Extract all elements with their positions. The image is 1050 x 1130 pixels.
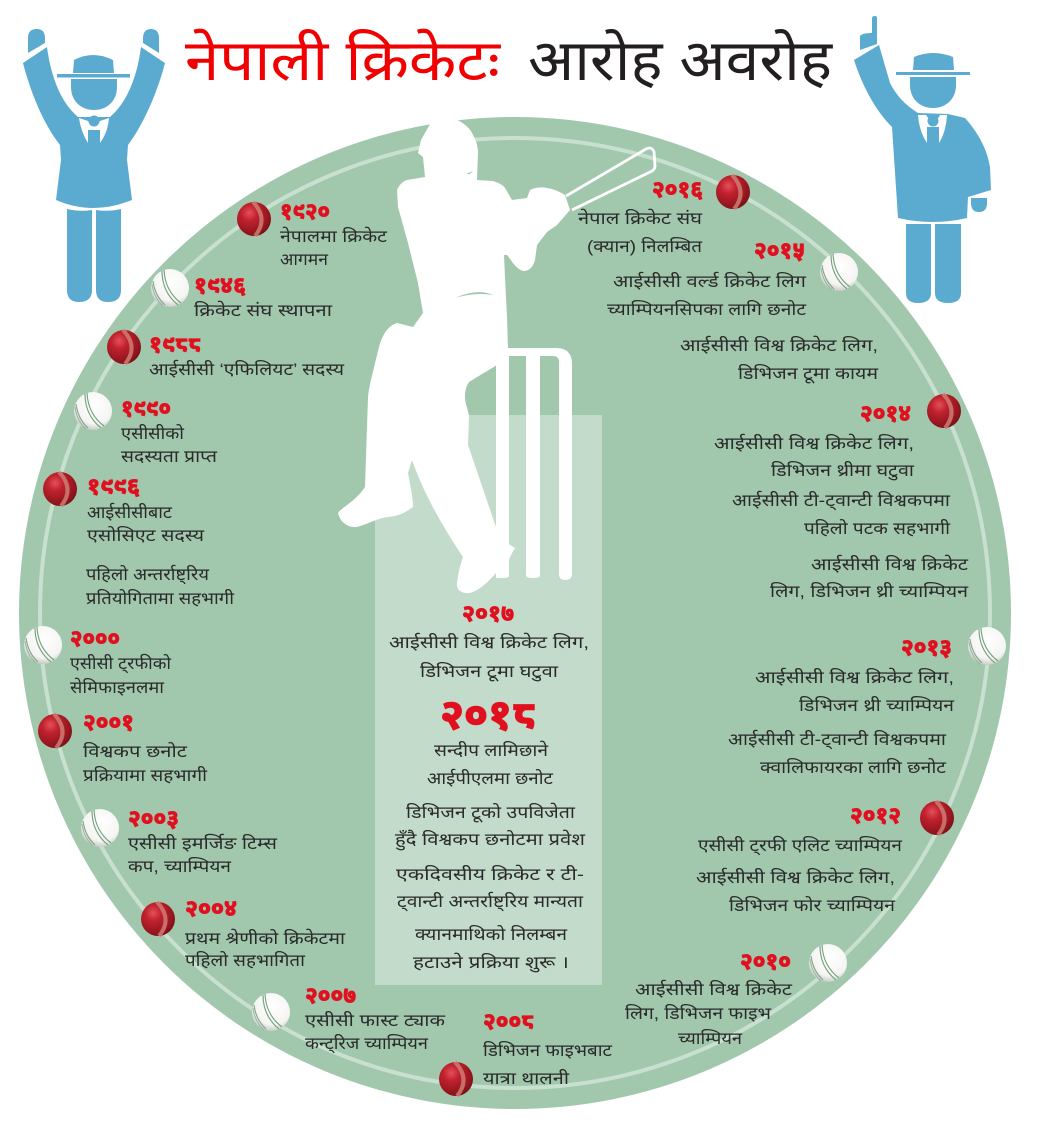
timeline 1996: एसोसिएट सदस्य (87, 525, 205, 545)
timeline 2000: सेमिफाइनलमा (70, 676, 165, 697)
timeline 2015: २०१५ (754, 237, 805, 263)
timeline 2003: एसीसी इमर्जिङ टिम्स (128, 833, 278, 853)
ball 1996 (43, 472, 77, 506)
timeline 2010 (625, 944, 847, 1048)
ball 2016 (716, 175, 750, 209)
ball 2013 (968, 627, 1006, 665)
timeline 1996: पहिलो अन्तर्राष्ट्रिय (86, 564, 210, 585)
icon: right umpire signalling out (854, 16, 991, 303)
timeline 2015: आईसीसी विश्व क्रिकेट लिग, (680, 334, 878, 355)
timeline 1920: १९२० (280, 198, 330, 224)
ball 1946 (151, 269, 189, 307)
timeline 1990: एसीसीको (121, 423, 185, 443)
timeline 2008: यात्रा थालनी (483, 1068, 570, 1088)
timeline 2010: आईसीसी विश्व क्रिकेट (635, 978, 793, 999)
timeline 2014: आईसीसी विश्व क्रिकेट लिग, (714, 432, 914, 453)
timeline 2018 (395, 691, 586, 974)
timeline 2017: आईसीसी विश्व क्रिकेट लिग, (389, 631, 589, 652)
timeline 2003: २००३ (128, 805, 179, 831)
timeline 2008: डिभिजन फाइभबाट (483, 1040, 612, 1060)
ball 2003 (81, 809, 119, 847)
timeline 1988: आईसीसी ‘एफिलियट’ सदस्य (149, 359, 345, 379)
timeline 2013: क्वालिफायरका लागि छनोट (760, 757, 946, 777)
timeline 2016: नेपाल क्रिकेट संघ (578, 207, 703, 228)
timeline 2014: २०१४ (860, 400, 911, 426)
timeline 2018: २०१८ (440, 691, 536, 738)
timeline 2007: २००७ (305, 982, 356, 1008)
timeline 1990: १९९० (121, 395, 171, 421)
timeline 1988 (107, 330, 345, 379)
timeline 2014: डिभिजन थ्रीमा घटुवा (771, 460, 915, 482)
timeline 2007 (252, 982, 446, 1054)
timeline 2004: २००४ (185, 895, 237, 921)
wicket stumps (496, 348, 572, 580)
timeline 1990: सदस्यता प्राप्त (121, 447, 217, 466)
timeline 2012: डिभिजन फोर च्याम्पियन (729, 895, 896, 915)
ball 2008 (439, 1062, 473, 1096)
ball 2010 (809, 944, 847, 982)
timeline 2018: हटाउने प्रक्रिया शुरू । (413, 951, 569, 974)
timeline 2014: पहिलो पटक सहभागी (804, 518, 951, 538)
timeline 2012 (696, 801, 954, 915)
timeline 2018: हुँदै विश्वकप छनोटमा प्रवेश (395, 828, 586, 851)
timeline 1946 (151, 269, 333, 320)
timeline 2004 (141, 895, 346, 970)
icon: left umpire signalling six (23, 29, 165, 302)
timeline 1946: क्रिकेट संघ स्थापना (194, 299, 333, 320)
timeline 2000: २००० (70, 625, 120, 651)
ball 2007 (252, 993, 290, 1031)
timeline 2018: सन्दीप लामिछाने (434, 739, 549, 760)
timeline 2017: २०१७ (462, 600, 514, 626)
ball 2000 (24, 626, 62, 664)
timeline 2018: क्यानमाथिको निलम्बन (415, 924, 568, 944)
timeline 2016 (578, 175, 750, 256)
timeline 1920: नेपालमा क्रिकेट (280, 225, 387, 246)
timeline 2000 (24, 625, 172, 697)
timeline 2004: प्रथम श्रेणीको क्रिकेटमा (185, 927, 346, 948)
timeline 2007: कन्ट्रिज च्याम्पियन (305, 1033, 429, 1054)
timeline 2015 (607, 237, 879, 385)
title: आरोह अवरोह (528, 28, 834, 93)
timeline 2014: आईसीसी विश्व क्रिकेट (811, 553, 969, 574)
timeline 2013: आईसीसी टी-ट्वान्टी विश्वकपमा (728, 729, 947, 750)
timeline 2016: (क्यान) निलम्बित (587, 236, 702, 256)
timeline 2015: च्याम्पियनसिपका लागि छनोट (607, 299, 806, 319)
timeline 2012: २०१२ (850, 802, 901, 828)
ball 1990 (74, 392, 112, 430)
timeline 2003 (81, 805, 278, 876)
timeline 1946: १९४६ (194, 272, 246, 298)
ball 2014 (927, 394, 961, 428)
timeline 1920: आगमन (280, 250, 329, 269)
ball 2004 (141, 902, 175, 936)
timeline 1996: आईसीसीबाट (87, 502, 172, 522)
timeline 2018: एकदिवसीय क्रिकेट र टी- (396, 863, 584, 884)
timeline 1996: १९९६ (87, 473, 140, 499)
timeline 2014: आईसीसी टी-ट्वान्टी विश्वकपमा (732, 490, 951, 511)
ball 2001 (38, 714, 72, 748)
timeline 2001: २००१ (83, 709, 134, 735)
timeline 2000: एसीसी ट्रफीको (70, 653, 172, 674)
timeline 2016: २०१६ (652, 176, 703, 202)
ball 2015 (820, 253, 858, 291)
timeline 2014: लिग, डिभिजन थ्री च्याम्पियन (770, 581, 969, 601)
timeline 2013 (728, 627, 1006, 777)
timeline 1990 (74, 392, 217, 466)
timeline 2017: डिभिजन टूमा घटुवा (420, 661, 559, 683)
timeline 2018: ट्वान्टी अन्तर्राष्ट्रिय मान्यता (397, 891, 584, 912)
timeline 2015: डिभिजन टूमा कायम (738, 363, 879, 385)
timeline 2010: २०१० (740, 948, 791, 974)
ball 1988 (107, 330, 141, 364)
timeline 2013: डिभिजन थ्री च्याम्पियन (799, 695, 955, 715)
timeline 2008: २००८ (483, 1008, 534, 1034)
timeline 2001: विश्वकप छनोट (83, 741, 188, 761)
timeline 2001: प्रक्रियामा सहभागी (83, 765, 208, 785)
cricket bat (566, 148, 655, 210)
timeline 2013: आईसीसी विश्व क्रिकेट लिग, (755, 666, 954, 687)
timeline 2018: डिभिजन टूको उपविजेता (406, 801, 576, 824)
timeline 2015: आईसीसी वर्ल्ड क्रिकेट लिग (613, 270, 807, 291)
batsman silhouette (338, 119, 655, 593)
timeline 2012: आईसीसी विश्व क्रिकेट लिग, (696, 866, 895, 887)
timeline 2001 (38, 709, 208, 785)
timeline 2007: एसीसी फास्ट ट्याक (305, 1010, 446, 1030)
pitch panel (375, 415, 602, 985)
timeline 2010: लिग, डिभिजन फाइभ (625, 1003, 772, 1023)
timeline 2014 (714, 394, 969, 601)
timeline 2017 (389, 600, 589, 683)
timeline 1996 (43, 472, 235, 608)
timeline 1996: प्रतियोगितामा सहभागी (86, 588, 235, 608)
timeline 2010: च्याम्पियन (678, 1028, 743, 1048)
timeline 2003: कप, च्याम्पियन (128, 856, 232, 876)
timeline 2018: आईपीएलमा छनोट (427, 768, 553, 788)
timeline 2012: एसीसी ट्रफी एलिट च्याम्पियन (698, 835, 903, 856)
timeline 1920 (237, 198, 387, 269)
ball 1920 (237, 202, 271, 236)
ball 2012 (920, 801, 954, 835)
timeline 2013: २०१३ (901, 634, 952, 660)
timeline 2004: पहिलो सहभागिता (185, 950, 306, 970)
timeline 1988: १९८८ (149, 331, 201, 357)
title: नेपाली क्रिकेटः (185, 28, 502, 93)
title (185, 28, 834, 93)
timeline 2008 (439, 1008, 612, 1096)
